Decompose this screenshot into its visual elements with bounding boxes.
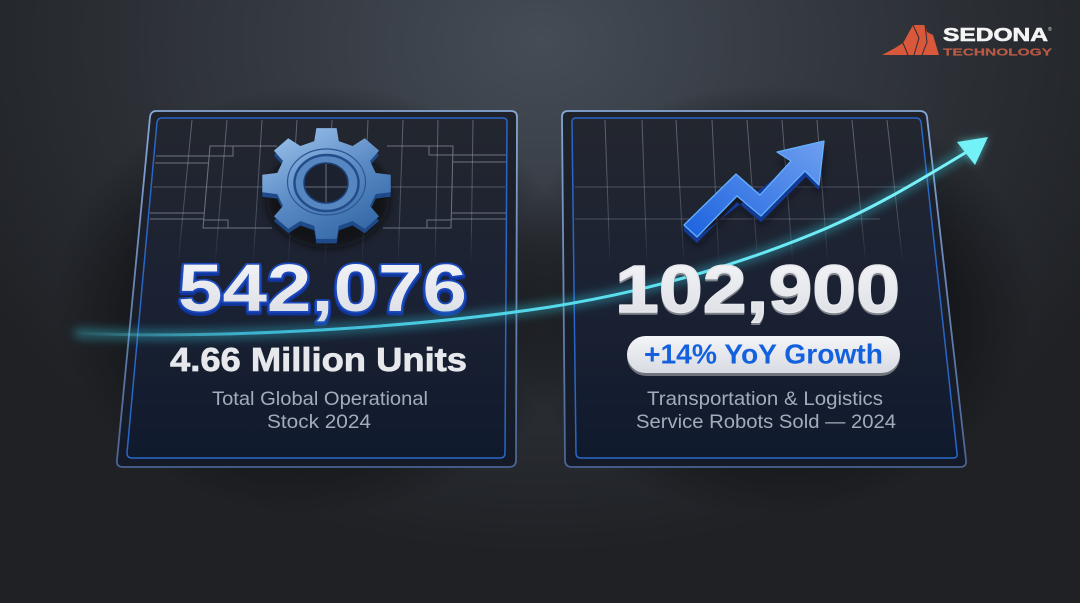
background grid [178,120,473,265]
gear rings [288,149,366,215]
trend glow [75,150,970,335]
panel: operational stock [117,111,517,467]
panel inner face [127,118,507,458]
circuit lines [150,146,506,228]
gear face [262,128,391,239]
logo registered mark: ® [1048,26,1052,33]
pill text: +14% YoY Growth [644,338,883,370]
panel frame [117,111,517,467]
logo: Sedona Technology [882,25,1053,58]
arrow face [684,141,824,237]
logo subtitle: TECHNOLOGY [943,48,1053,58]
logo wordmark: SEDONA [943,25,1048,45]
background grid [605,120,903,265]
panel shadow right [503,85,1033,515]
arrow head glow [957,137,988,165]
rising trend line [75,137,988,335]
panel: service robots sold [562,111,966,467]
big number: 542,076: 542,076 [178,251,467,326]
caption: service robots: Transportation & Logistics [647,388,883,410]
trend line [75,150,970,335]
big number: 542,076: 542,076 [178,253,467,328]
stat label: 4.66 Million Units: 4.66 Million Units [170,341,467,378]
caption: operational stock [212,388,428,433]
panel inner face [572,118,957,458]
big number: 102,900: 102,900 [615,254,900,329]
gear hole [304,163,348,203]
caption: operational stock: Total Global Operational [212,388,428,410]
big number: 102,900: 102,900 [615,252,900,327]
caption: operational stock: Stock 2024 [267,411,371,433]
caption: service robots: Service Robots Sold — 2024 [636,411,896,433]
arrow head [957,137,988,165]
arrow extrusion [684,141,824,243]
panel frame [562,111,966,467]
icon: rising arrow [684,141,825,246]
caption: service robots [636,388,896,433]
icon: mountain mark [882,25,939,55]
growth pill [627,336,900,376]
gear extrusion [262,133,391,243]
icon: gear [262,128,391,248]
panel shadow left [55,85,585,515]
